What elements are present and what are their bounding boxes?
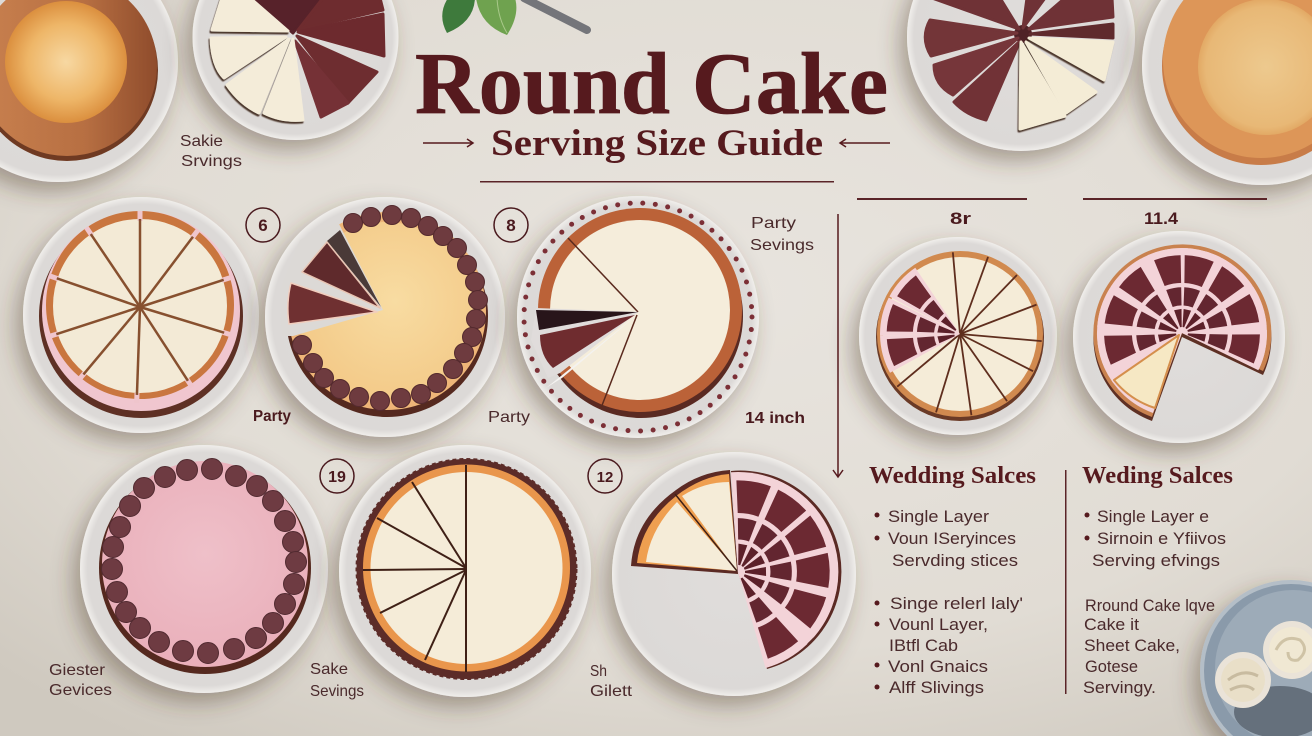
label: giester gevices: Gevices (49, 682, 112, 699)
text column: wedding salces left: IBtfl Cab (889, 636, 958, 655)
text column: wedding salces left: Vonl Gnaics (888, 657, 988, 676)
cake: 8r mixed slices (859, 237, 1057, 435)
slate plate with cream cups (1200, 580, 1312, 736)
label: giester gevices: Giester (49, 662, 106, 679)
cake: top-right golden sponge (1142, 0, 1312, 185)
missing wedge (280, 222, 383, 336)
label: sakie servings: Sakie (180, 133, 223, 150)
label: giester gevices (49, 662, 112, 699)
arrow: vertical down (833, 214, 843, 477)
text column: weding salces right: Sirnoin e Yfiivos (1097, 529, 1226, 548)
subtitle with arrows (423, 123, 890, 164)
label: party servings: Sevings (750, 237, 814, 254)
label: party servings (750, 215, 814, 254)
title: Round Cake (415, 36, 888, 133)
label: party servings: Party (751, 215, 796, 232)
label: sakie servings: Srvings (181, 153, 242, 170)
cake: 14 inch cream with dotted plate (517, 196, 759, 438)
badge: 12: 12 (597, 469, 613, 486)
column rule and size: 11.4: 11.4 (1144, 209, 1179, 228)
label: sakie servings (180, 133, 242, 170)
label: sh gilett: Sh (590, 663, 607, 680)
badge: 6: 6 (258, 216, 268, 235)
label: sh gilett: Gilett (590, 683, 633, 700)
subtitle with arrows: Serving Size Guide (491, 123, 823, 164)
chocolate slice upper (302, 242, 380, 308)
text column: wedding salces left (869, 463, 1036, 697)
cake: top-right chocolate and cream slices (907, 0, 1135, 151)
text column: weding salces right: Rround Cake lqve (1085, 596, 1215, 615)
dark gap (327, 230, 381, 307)
text column: wedding salces left: Singe relerl laly' (890, 594, 1023, 613)
cake: pink frosted with chocolate beads (80, 445, 328, 693)
label: party 2: Party (488, 409, 530, 426)
text column: weding salces right: Servingy. (1083, 678, 1156, 697)
icon: cake knife (524, 0, 587, 30)
cake: top-left golden sponge (0, 0, 178, 182)
label: 14 inch: 14 inch (745, 410, 805, 427)
text column: weding salces right: Gotese (1085, 657, 1138, 676)
badge: 8: 8 (506, 216, 516, 235)
text column: wedding salces left: Voun ISeryinces (888, 529, 1016, 548)
text column: wedding salces left: Vounl Layer, (889, 615, 988, 634)
badge: 8 (494, 208, 528, 242)
text column: weding salces right: Weding Salces (1082, 463, 1233, 489)
text column: weding salces right (1082, 463, 1233, 697)
chocolate sector base (731, 471, 841, 669)
text column: weding salces right: Sheet Cake, (1084, 636, 1180, 655)
vertical divider between columns (1065, 470, 1066, 694)
cake: yellow cake with chocolate beads (265, 197, 505, 437)
badge: 19 (320, 459, 354, 493)
cake: top plate with cream and chocolate slices (192, 0, 398, 140)
label: party: Party (253, 408, 291, 425)
text column: wedding salces left: Servding stices (892, 551, 1018, 570)
chocolate beads (292, 206, 488, 410)
column rule and size: 8r: 8r (950, 209, 971, 228)
badge: 12 (588, 459, 622, 493)
label: sh gilett (590, 663, 633, 700)
divider under subtitle (480, 181, 834, 182)
cream slices (631, 470, 738, 574)
chocolate slice lower (288, 283, 377, 324)
cake: 11.4 chocolate sliced with missing wedge (1073, 231, 1285, 443)
text column: weding salces right: Serving efvings (1092, 551, 1220, 570)
badge: 6 (246, 208, 280, 242)
label: sake sevings: Sevings (310, 683, 364, 700)
label: sake sevings (310, 661, 364, 700)
text column: weding salces right: Single Layer e (1097, 507, 1209, 526)
cut wedge slices (531, 308, 638, 378)
cake: partial with chocolate wedges (612, 452, 856, 696)
text column: wedding salces left: Single Layer (888, 507, 989, 526)
cake: 6 inch cream slices (23, 197, 259, 433)
cake: cream half sliced (339, 445, 591, 697)
text column: wedding salces left: Wedding Salces (869, 463, 1036, 489)
decorative leaves (442, 0, 516, 35)
badge: 19: 19 (328, 469, 346, 486)
text column: weding salces right: Cake it (1084, 615, 1139, 634)
text column: wedding salces left: Alff Slivings (889, 678, 984, 697)
label: sake sevings: Sake (310, 661, 348, 678)
cream slice (1114, 335, 1179, 408)
